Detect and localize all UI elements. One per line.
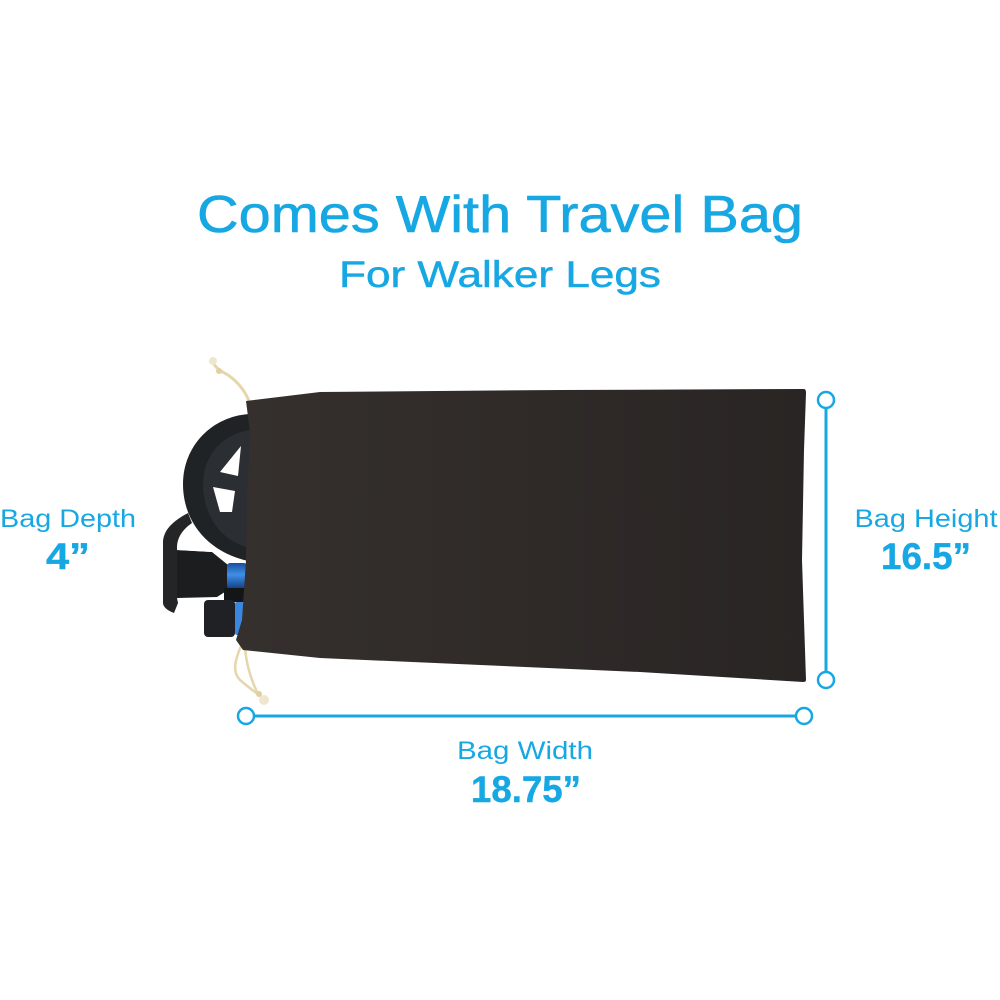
label: bag width: 18.75” xyxy=(471,769,581,810)
subtitle: For Walker Legs xyxy=(339,254,661,295)
label: bag depth xyxy=(0,505,136,577)
walker leg tip xyxy=(204,600,235,637)
blue walker tube lower xyxy=(235,602,244,635)
label: bag height: 16.5” xyxy=(881,536,971,577)
title: Comes With Travel Bag xyxy=(197,186,803,244)
travel bag xyxy=(236,389,806,682)
blue walker tube upper xyxy=(227,563,247,589)
bottom drawstring xyxy=(235,646,269,705)
walker handle grip xyxy=(163,513,228,613)
label: bag height xyxy=(854,505,998,577)
label: bag height: Bag Height xyxy=(854,505,998,533)
dimension: bag height xyxy=(818,392,834,688)
dark gap behind tubes xyxy=(224,588,248,602)
label: bag width: Bag Width xyxy=(457,737,593,765)
walker wheel xyxy=(183,414,260,561)
label: bag depth: 4” xyxy=(46,536,90,577)
label: bag width xyxy=(457,737,593,810)
dimension: bag width xyxy=(238,708,812,724)
top drawstring xyxy=(209,357,249,401)
label: bag depth: Bag Depth xyxy=(0,505,136,533)
